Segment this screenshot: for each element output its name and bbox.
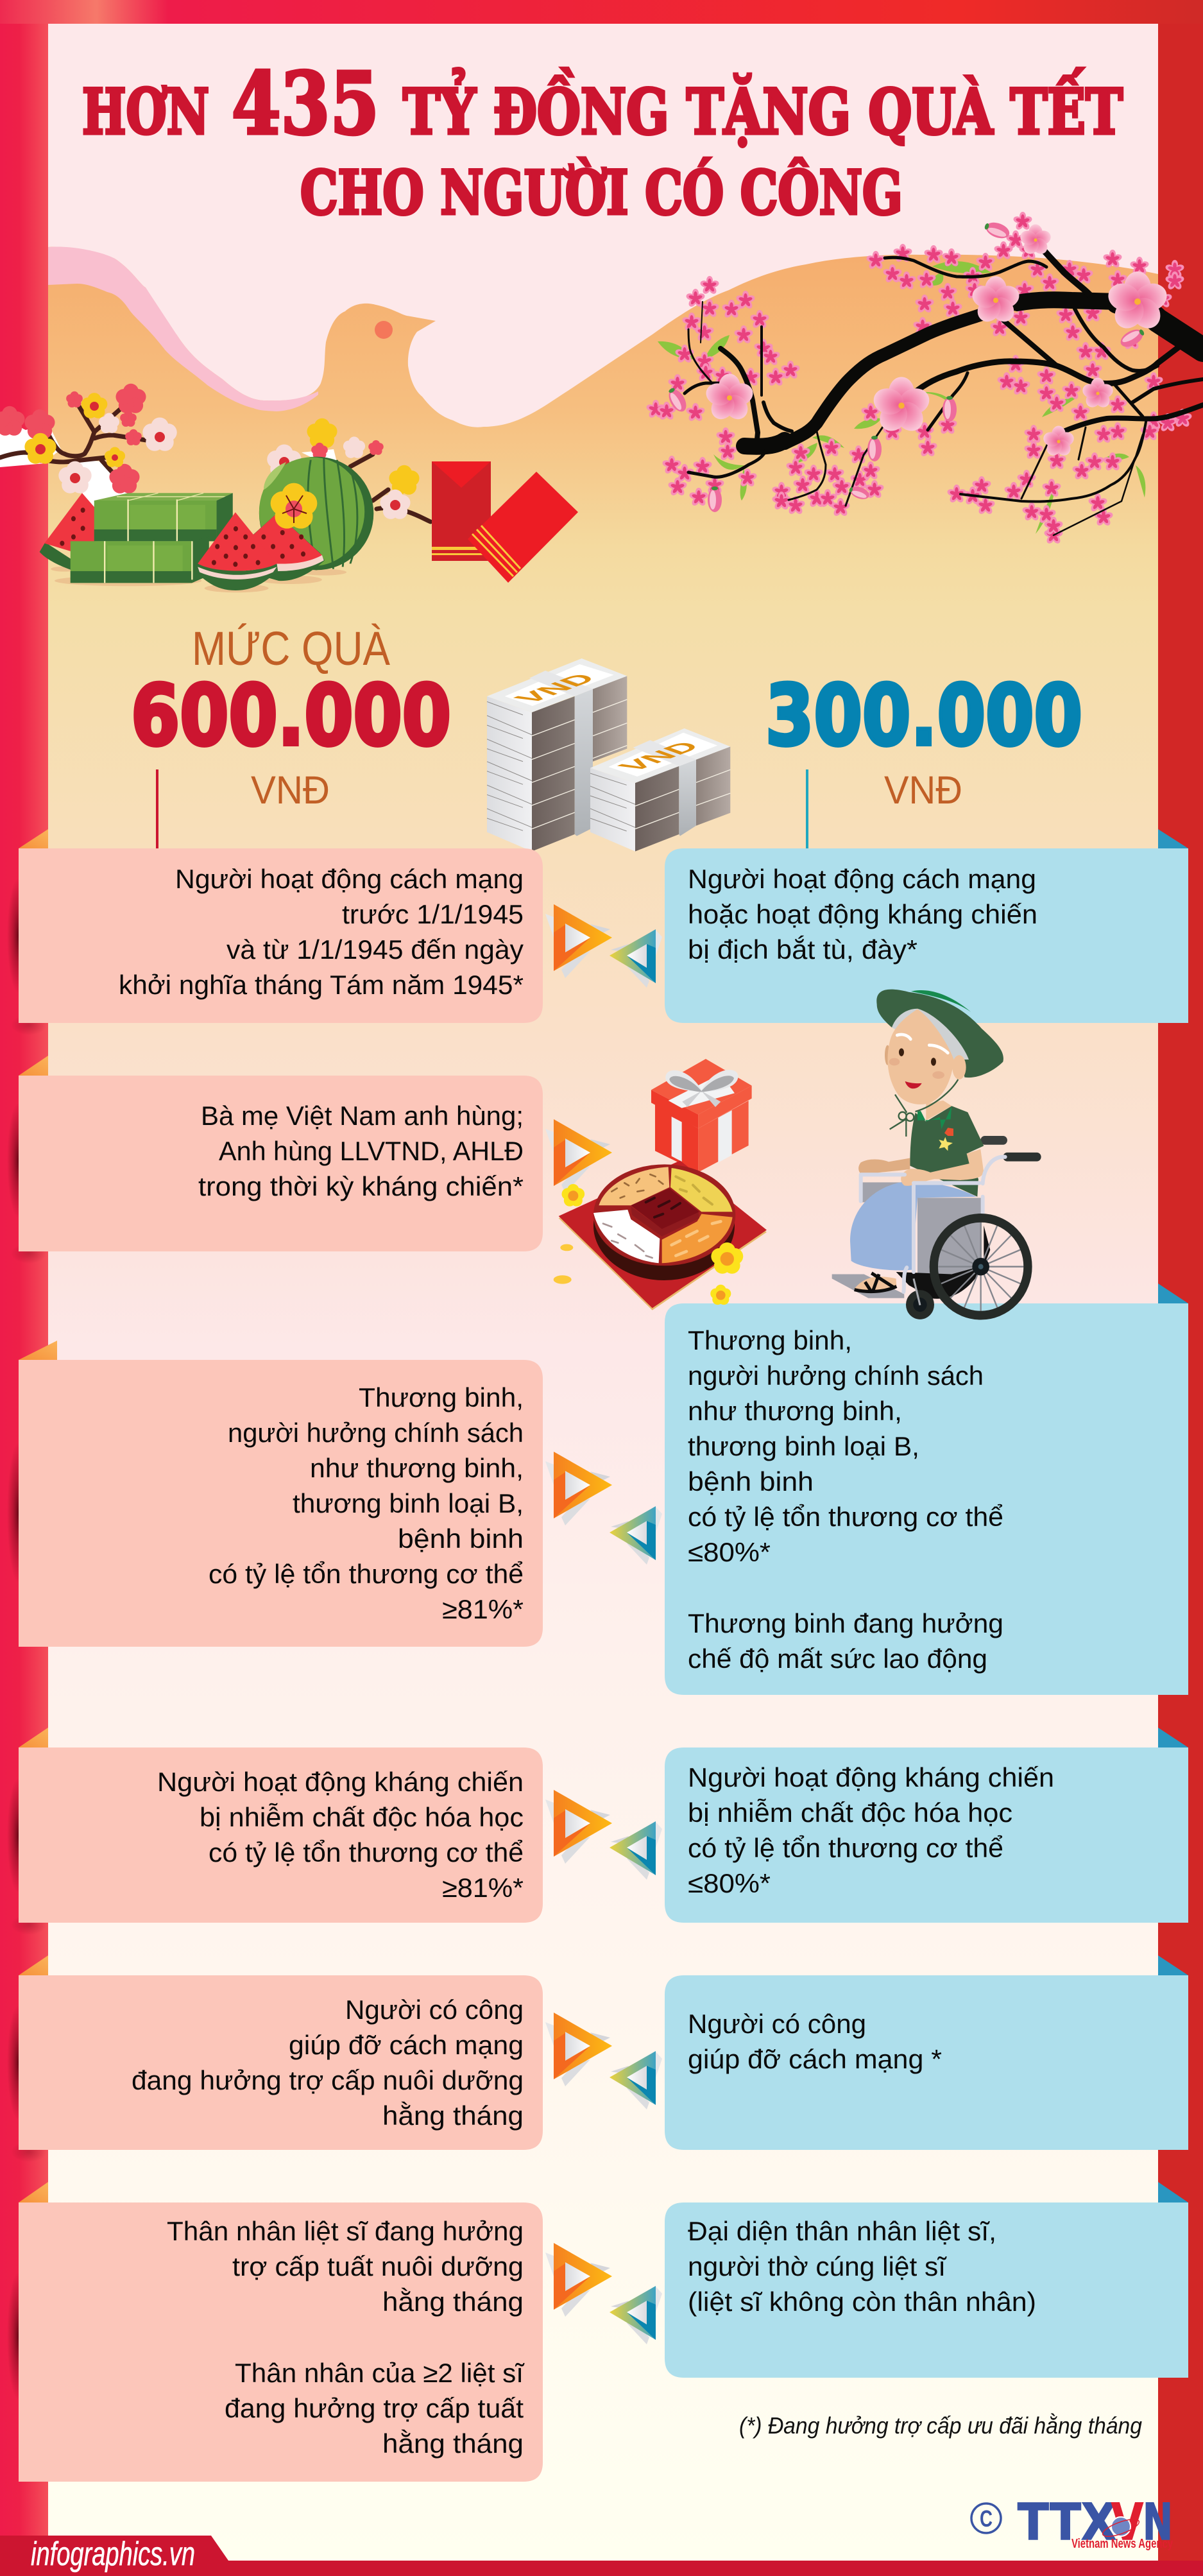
row 3: right panel: chế độ mất sức lao động: [688, 1644, 987, 1674]
row 5: left panel: giúp đỡ cách mạng: [289, 2030, 524, 2060]
row 3: left panel: bệnh binh: [398, 1524, 524, 1554]
row 3: left panel: như thương binh,: [310, 1453, 524, 1483]
row 1: left panel: Người hoạt động cách mạng: [175, 864, 524, 894]
left watermelon slice: [40, 493, 96, 570]
footnote: (*) Đang hưởng trợ cấp ưu đãi hằng tháng: [739, 2412, 1142, 2439]
row 4: left panel: ≥81%*: [442, 1873, 524, 1903]
big stack: [487, 658, 627, 852]
row 2: left panel: [19, 1076, 543, 1251]
frame: top bar: [0, 0, 1203, 24]
row 3: left panel: người hưởng chính sách: [228, 1418, 524, 1448]
illustration: gift box and tet tray: [554, 1059, 767, 1310]
folds: right column: [1158, 829, 1188, 2202]
row 5: left panel: hằng tháng: [382, 2100, 524, 2131]
hills and bird silhouette: [48, 24, 1158, 427]
row 3: left panel: thương binh loại B,: [293, 1488, 524, 1518]
row 6: arrow right: [610, 2286, 662, 2344]
row 2: arrow left: [545, 1119, 612, 1193]
row 4: right panel: bị nhiễm chất độc hóa học: [688, 1798, 1012, 1828]
large blossoms: [703, 225, 1170, 458]
right watermelon slice: [241, 513, 325, 581]
big watermelon: [259, 457, 373, 570]
row 5: left panel: [19, 1975, 543, 2150]
connector line left: [156, 769, 158, 854]
title: HƠN: [82, 76, 209, 148]
row 4: right panel: có tỷ lệ tổn thương cơ thể: [688, 1833, 1003, 1863]
source tag: infographics.vn: [31, 2536, 195, 2573]
row 1: left panel: và từ 1/1/1945 đến ngày: [226, 934, 524, 965]
row 3: right panel: bệnh binh: [688, 1466, 814, 1497]
pink band: [48, 247, 318, 411]
logo: TTXVN: [971, 2494, 1173, 2552]
row 5: arrow right: [610, 2051, 662, 2109]
illustration: left tet flower branch: [0, 384, 431, 522]
sandal: [855, 1273, 896, 1292]
row 3: right panel: [665, 1303, 1188, 1695]
row 1: left panel: [19, 848, 543, 1023]
row 3: left panel: có tỷ lệ tổn thương cơ thể: [209, 1559, 524, 1589]
row 3: right panel: người hưởng chính sách: [688, 1361, 984, 1391]
banh chung top: [94, 493, 233, 541]
row 4: right panel: [665, 1747, 1188, 1923]
row 4: left panel: có tỷ lệ tổn thương cơ thể: [209, 1837, 524, 1868]
row 3: left panel: ≥81%*: [442, 1594, 524, 1624]
row 6: left panel: hằng tháng: [382, 2428, 524, 2459]
brown twigs: [0, 406, 431, 522]
medal: [939, 1128, 953, 1151]
title: [82, 54, 1123, 228]
row 6: left panel: Thân nhân của ≥2 liệt sĩ: [235, 2358, 525, 2388]
row 2: left panel: Bà mẹ Việt Nam anh hùng;: [201, 1101, 524, 1131]
leaves: [658, 261, 1145, 534]
blanket: [850, 1182, 977, 1270]
row 1: right panel: bị địch bắt tù, đày*: [688, 934, 917, 965]
row 1: left panel: trước 1/1/1945: [342, 899, 524, 929]
shirt: [910, 1106, 984, 1197]
row 3: right panel: như thương binh,: [688, 1396, 902, 1426]
illustration: banh chung and watermelon: [40, 457, 373, 592]
row 3: right panel: thương binh loại B,: [688, 1431, 919, 1461]
wordmark: TTX: [1018, 2494, 1116, 2552]
unit right: VNĐ: [884, 768, 962, 812]
row 3: left panel: Thương binh,: [359, 1382, 524, 1413]
wordmark: N: [1143, 2494, 1173, 2552]
flowers: [0, 384, 420, 519]
right arm: [901, 1149, 984, 1186]
row 1: arrow right: [610, 929, 662, 988]
amount: 300.000: 300.000: [765, 667, 1082, 764]
row 4: right panel: ≤80%*: [688, 1868, 771, 1898]
row 3: right panel: có tỷ lệ tổn thương cơ thể: [688, 1502, 1003, 1532]
copyright mark: [971, 2503, 1001, 2533]
illustration: veteran in wheelchair: [832, 990, 1041, 1319]
tray bowl: [593, 1164, 735, 1280]
icon: money stacks: [487, 658, 730, 852]
icon: red envelopes: [432, 461, 578, 583]
chair understructure: [896, 1226, 990, 1299]
row 5: right panel: Người có công: [688, 2009, 866, 2039]
footplate: [832, 1274, 904, 1298]
illustration: cherry blossom branch: [645, 212, 1203, 545]
amount heading: MỨC QUÀ: [192, 622, 391, 675]
centre watermelon slice: [194, 512, 278, 590]
row 3: right panel: Thương binh,: [688, 1325, 852, 1355]
white branch glow: [0, 417, 340, 520]
row 1: left panel: khởi nghĩa tháng Tám năm 1945*: [119, 970, 524, 1000]
frame: bottom bar: [0, 2561, 1203, 2576]
wheelchair handles: [980, 1136, 1041, 1162]
row 6: right panel: (liệt sĩ không còn thân nhân): [688, 2287, 1036, 2317]
row 1: arrow left: [545, 904, 612, 978]
ground shadows: [51, 567, 346, 592]
row 6: right panel: Đại diện thân nhân liệt sĩ,: [688, 2216, 996, 2246]
row 6: arrow left: [545, 2243, 612, 2317]
unit left: VNĐ: [251, 768, 330, 812]
row 6: left panel: [19, 2202, 543, 2482]
globe: [1101, 2516, 1141, 2540]
row 6: left panel: hằng tháng: [382, 2287, 524, 2317]
buds: [665, 219, 1147, 512]
tray mat: [559, 1160, 767, 1310]
envelope back: [432, 461, 491, 561]
row 4: left panel: [19, 1747, 543, 1923]
title: CHO NGƯỜI CÓ CÔNG: [300, 157, 903, 228]
row 5: left panel: Người có công: [345, 1995, 524, 2025]
row 1: right panel: [665, 848, 1188, 1023]
bird eye: [375, 321, 393, 339]
wheelchair seat: [862, 1182, 982, 1274]
small stack: [590, 728, 730, 852]
row 5: right panel: [665, 1975, 1188, 2150]
row 4: arrow left: [545, 1790, 612, 1864]
row 4: left panel: Người hoạt động kháng chiến: [157, 1767, 524, 1797]
big wheel: [934, 1218, 1028, 1316]
row 3: right panel: Thương binh đang hưởng: [688, 1608, 1003, 1638]
icon: yellow blossom on watermelon: [271, 483, 317, 529]
row 2: left panel: Anh hùng LLVTND, AHLĐ: [219, 1136, 524, 1166]
row 4: left panel: bị nhiễm chất độc hóa học: [200, 1802, 524, 1832]
money label: small stack: VND: [611, 739, 706, 774]
left arm: [858, 1158, 910, 1176]
wordmark: V: [1111, 2494, 1143, 2552]
row 1: right panel: hoặc hoạt động kháng chiến: [688, 899, 1037, 929]
panel shadows on left bar: [7, 878, 47, 2400]
head: [876, 990, 1003, 1104]
row 6: left panel: Thân nhân liệt sĩ đang hưởng: [167, 2216, 524, 2246]
row 5: right panel: giúp đỡ cách mạng *: [688, 2044, 942, 2074]
amount: 600.000: 600.000: [131, 667, 451, 764]
wheelchair frame: [861, 1157, 1005, 1292]
row 3: arrow right: [610, 1506, 662, 1565]
money label: big stack: VND: [508, 671, 602, 706]
row 6: right panel: người thờ cúng liệt sĩ: [688, 2251, 947, 2281]
banh chung bottom: [71, 537, 209, 583]
row 4: arrow right: [610, 1821, 662, 1880]
row 2: left panel: trong thời kỳ kháng chiến*: [198, 1171, 524, 1201]
row 5: arrow left: [545, 2013, 612, 2086]
row 3: left panel: [19, 1360, 543, 1647]
connector line right: [806, 769, 808, 854]
row 3: right panel: ≤80%*: [688, 1537, 771, 1567]
caster wheel: [906, 1278, 934, 1319]
row 1: right panel: Người hoạt động cách mạng: [688, 864, 1036, 894]
yellow blossoms: [554, 1184, 743, 1305]
wordmark: [1018, 2494, 1173, 2552]
hat string: [890, 1079, 958, 1137]
row 3: arrow left: [545, 1452, 612, 1525]
row 6: left panel: trợ cấp tuất nuôi dưỡng: [232, 2251, 524, 2281]
small blossoms: [645, 212, 1193, 545]
branches: [685, 249, 1203, 535]
folds: left column: [19, 829, 57, 2202]
gift box: [651, 1059, 752, 1172]
row 6: right panel: [665, 2202, 1188, 2378]
envelope front: [468, 472, 578, 583]
row 6: left panel: đang hưởng trợ cấp tuất: [225, 2393, 524, 2423]
row 5: left panel: đang hưởng trợ cấp nuôi dưỡng: [132, 2065, 524, 2095]
row 4: right panel: Người hoạt động kháng chiến: [688, 1762, 1054, 1792]
title: 435: [232, 54, 379, 154]
copyright mark: C: [980, 2505, 993, 2532]
frame: left bar: [0, 0, 48, 2576]
collar: [917, 1101, 951, 1129]
frame: right bar: [1158, 0, 1203, 2576]
